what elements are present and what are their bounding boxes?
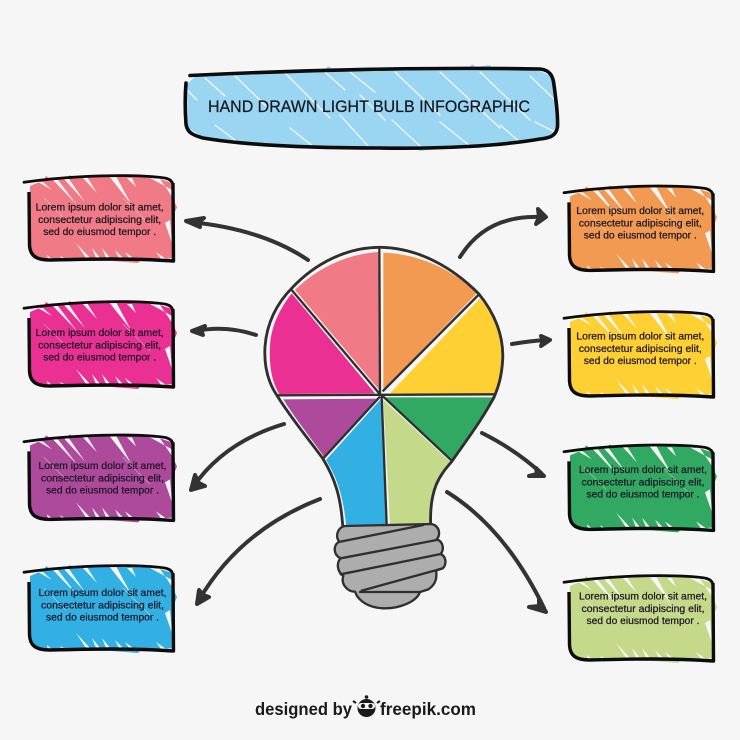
segment: green: [385, 397, 496, 462]
segment: yellow: [390, 298, 503, 394]
panel: yellow text box: Lorem ipsum dolor sit amet,: [576, 332, 704, 342]
banner scribble highlights: [187, 72, 555, 148]
panel: lime text box: Lorem ipsum dolor sit amet,: [579, 592, 707, 602]
panel: magenta text box: consectetur adipiscing elit,: [38, 340, 161, 351]
panel: green text box: consectetur adipiscing elit,: [582, 477, 704, 488]
segment: pink: [295, 252, 379, 390]
credit text right: freepik.com: [380, 699, 476, 719]
panel: yellow text box: consectetur adipiscing elit,: [579, 344, 702, 355]
segment: blue: [326, 399, 386, 525]
panel: pink text box: [24, 175, 177, 263]
arrow: magenta segment to magenta box: [192, 326, 256, 335]
segment: magenta: [270, 293, 375, 394]
screw base: [335, 524, 445, 608]
panel: pink text box: Lorem ipsum dolor sit amet,: [36, 202, 164, 214]
banner outline: [185, 68, 558, 148]
base body: [335, 524, 445, 608]
arrow: orange segment to orange box: [460, 209, 546, 257]
credit text left: designed by: [255, 699, 352, 719]
segment divider lines: [277, 248, 495, 525]
panel: lime text box: sed do eiusmod tempor .: [586, 616, 700, 627]
panel: blue text box: consectetur adipiscing elit,: [41, 600, 164, 611]
panel: orange text box: [564, 185, 717, 273]
panel: magenta text box: sed do eiusmod tempor .: [43, 352, 156, 364]
panel: green text box: Lorem ipsum dolor sit amet,: [579, 465, 707, 476]
segment: purple: [283, 399, 377, 457]
panel: magenta text box: Lorem ipsum dolor sit amet,: [36, 328, 164, 339]
panel: magenta text box: [24, 301, 177, 389]
arrow: green segment to green box: [482, 433, 544, 476]
segment: lime: [383, 400, 450, 525]
panel: yellow text box: sed do eiusmod tempor .: [584, 356, 697, 367]
title banner: [185, 64, 558, 151]
panel: yellow text box: [564, 311, 717, 399]
panel: purple text box: Lorem ipsum dolor sit amet,: [38, 461, 166, 472]
icon: freepik mascot: [353, 695, 380, 717]
panel: lime text box: consectetur adipiscing elit,: [582, 604, 704, 615]
arrow: yellow segment to yellow box: [512, 336, 550, 346]
footer: freepik credit: [255, 695, 476, 719]
base thread lines: [341, 525, 443, 592]
arrow: pink segment to pink box: [186, 218, 308, 260]
light bulb: [265, 247, 503, 608]
panel: purple text box: [24, 434, 177, 522]
panel: orange text box: sed do eiusmod tempor .: [584, 230, 697, 242]
panel: purple text box: sed do eiusmod tempor .: [46, 486, 159, 496]
segment: orange: [383, 253, 477, 390]
panel: blue text box: Lorem ipsum dolor sit amet,: [38, 588, 166, 599]
arrow: lime segment to lime box: [447, 492, 546, 612]
arrow: blue segment to blue box: [197, 499, 320, 604]
panel: orange text box: consectetur adipiscing elit,: [579, 218, 702, 229]
panel: pink text box: consectetur adipiscing elit,: [38, 215, 161, 226]
panel: green text box: [564, 444, 717, 532]
panel: purple text box: consectetur adipiscing elit,: [41, 473, 164, 484]
panel: green text box: sed do eiusmod tempor .: [586, 490, 700, 500]
bulb outline: [265, 247, 503, 525]
title: HAND DRAWN LIGHT BULB INFOGRAPHIC: [208, 97, 530, 116]
panel: orange text box: Lorem ipsum dolor sit amet,: [576, 206, 704, 217]
panel: lime text box: [564, 575, 717, 663]
arrow: purple segment to purple box: [191, 424, 284, 490]
panel: blue text box: [24, 565, 177, 653]
banner scribble fill: [187, 64, 557, 151]
panel: blue text box: sed do eiusmod tempor .: [46, 612, 159, 624]
panel: pink text box: sed do eiusmod tempor .: [43, 227, 156, 238]
